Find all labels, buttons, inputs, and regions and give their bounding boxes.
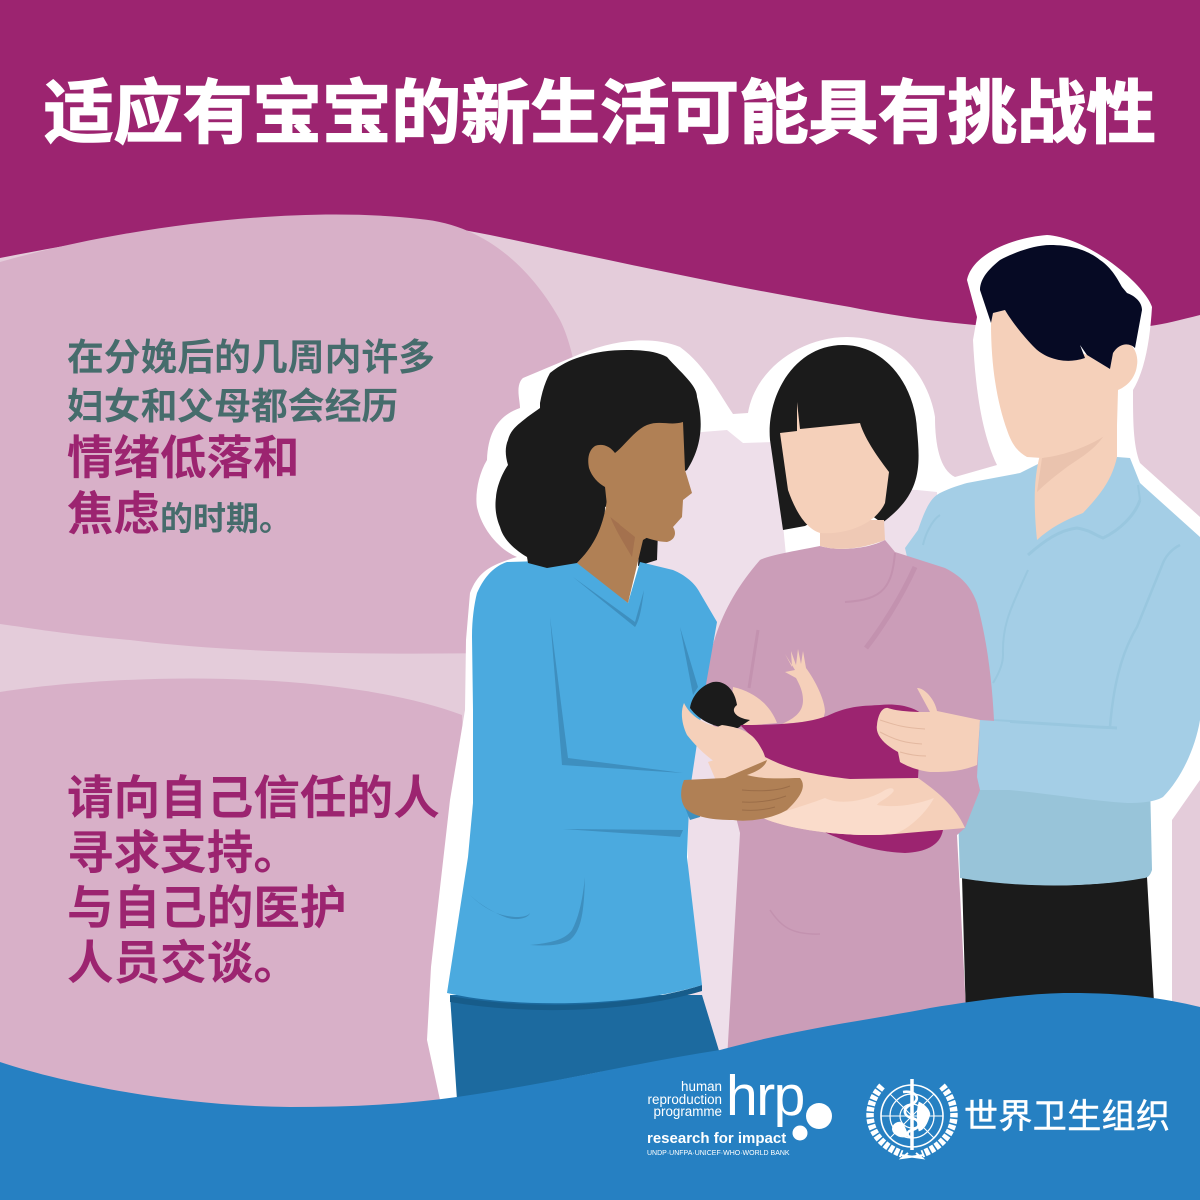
man shirt lower xyxy=(957,780,1152,886)
line 3: 与自己的医护 xyxy=(67,882,347,934)
woman hair xyxy=(495,350,701,568)
logo: WHO emblem xyxy=(870,1079,954,1158)
baby blanket lower xyxy=(820,830,943,853)
mother neck xyxy=(820,520,885,549)
line 4 mixed: 焦虑的时期。 xyxy=(67,488,292,540)
background: purple header band xyxy=(0,0,1200,331)
logo: hrp dots xyxy=(792,1103,832,1140)
background: blue footer wave xyxy=(0,993,1200,1200)
mother face xyxy=(780,402,889,533)
neck shadow xyxy=(608,510,635,557)
woman neck xyxy=(577,490,660,603)
man hair xyxy=(980,245,1142,369)
woman face xyxy=(588,422,692,542)
dress folds xyxy=(749,553,915,934)
supporter hand xyxy=(681,760,803,821)
panel: upper rose blob xyxy=(0,215,582,654)
illustration: baby and hands xyxy=(681,649,1010,853)
line 2: 寻求支持。 xyxy=(67,827,300,879)
text block: low mood and anxiety xyxy=(67,337,435,540)
top fold shades xyxy=(470,577,700,945)
title: 适应有宝宝的新生活可能具有挑战性 xyxy=(44,74,1156,152)
baby arm xyxy=(782,649,825,724)
mother hand light xyxy=(763,788,934,835)
tagline: research for impact xyxy=(647,1130,786,1147)
man shirt xyxy=(905,457,1200,803)
panel: lower rose blob xyxy=(0,678,480,1110)
mother hair xyxy=(770,345,919,530)
man neck xyxy=(1035,420,1117,540)
small name: reproduction xyxy=(648,1092,722,1107)
illustration: supporter (woman) xyxy=(447,350,720,1100)
line 3 highlighted: 情绪低落和 xyxy=(67,432,300,484)
line 4: 人员交谈。 xyxy=(67,937,300,989)
man cuff over hand xyxy=(977,720,1010,790)
baby head xyxy=(730,687,777,726)
mother dress xyxy=(704,540,994,1060)
baby hair xyxy=(690,682,750,728)
man face xyxy=(991,310,1137,458)
man trousers xyxy=(962,877,1155,1020)
cradling hand xyxy=(682,703,767,770)
woman hair back xyxy=(638,530,658,566)
man neck shade xyxy=(1037,428,1108,492)
line 1: 在分娩后的几周内许多 xyxy=(67,337,435,378)
small name: programme xyxy=(654,1104,722,1119)
small name: human xyxy=(681,1079,722,1094)
logo: WHO name: 世界卫生组织 xyxy=(964,1098,1170,1136)
woman top xyxy=(447,560,717,1003)
text block: seek support xyxy=(67,772,440,989)
big hrp: hrp xyxy=(726,1064,804,1128)
mother forearm xyxy=(708,745,965,835)
partner hand xyxy=(877,688,980,772)
pale backdrop between figures xyxy=(640,430,940,1070)
illustration: partner (man) xyxy=(905,245,1200,1020)
logo: hrp wordmark xyxy=(647,1064,804,1157)
baby body xyxy=(740,705,922,779)
small name xyxy=(648,1079,722,1119)
line 2: 妇女和父母都会经历 xyxy=(67,386,398,427)
woman trousers xyxy=(450,995,720,1100)
man shirt folds xyxy=(923,485,1180,728)
partners: UNDP·UNFPA·UNICEF·WHO·WORLD BANK xyxy=(647,1150,790,1157)
white figure outline xyxy=(427,235,1200,1100)
illustration: new mother xyxy=(704,345,994,1060)
line 1: 请向自己信任的人 xyxy=(67,772,440,824)
